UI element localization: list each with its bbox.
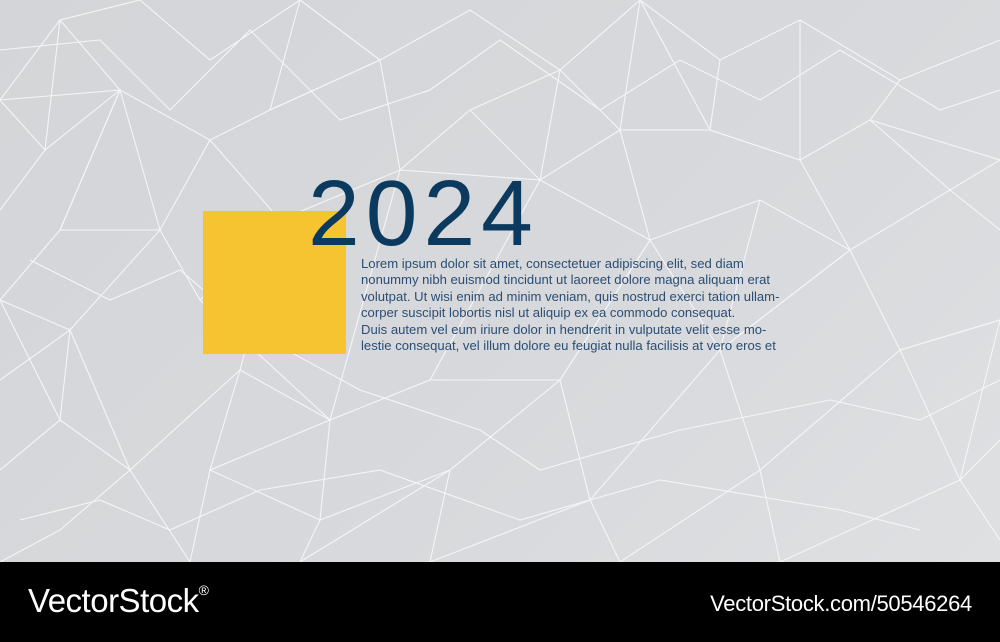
body text — [361, 256, 779, 353]
body text: volutpat. Ut wisi enim ad minim veniam, quis nostrud exerci tation ullam- — [361, 289, 779, 304]
body text: corper suscipit lobortis nisl ut aliquip ex ea commodo consequat. — [361, 305, 735, 320]
body text: lestie consequat, vel illum dolore eu feugiat nulla facilisis at vero eros et — [361, 338, 776, 353]
footer id text: VectorStock.com/50546264 — [710, 591, 972, 616]
footer logo text: VectorStock® — [28, 582, 208, 619]
footer bar — [0, 562, 1000, 642]
title: 2024: 2024 — [308, 161, 539, 265]
yellow square — [203, 211, 346, 354]
body text: Duis autem vel eum iriure dolor in hendrerit in vulputate velit esse mo- — [361, 322, 766, 337]
body text: nonummy nibh euismod tincidunt ut laoreet dolore magna aliquam erat — [361, 272, 770, 287]
body text: Lorem ipsum dolor sit amet, consectetuer adipiscing elit, sed diam — [361, 256, 744, 271]
